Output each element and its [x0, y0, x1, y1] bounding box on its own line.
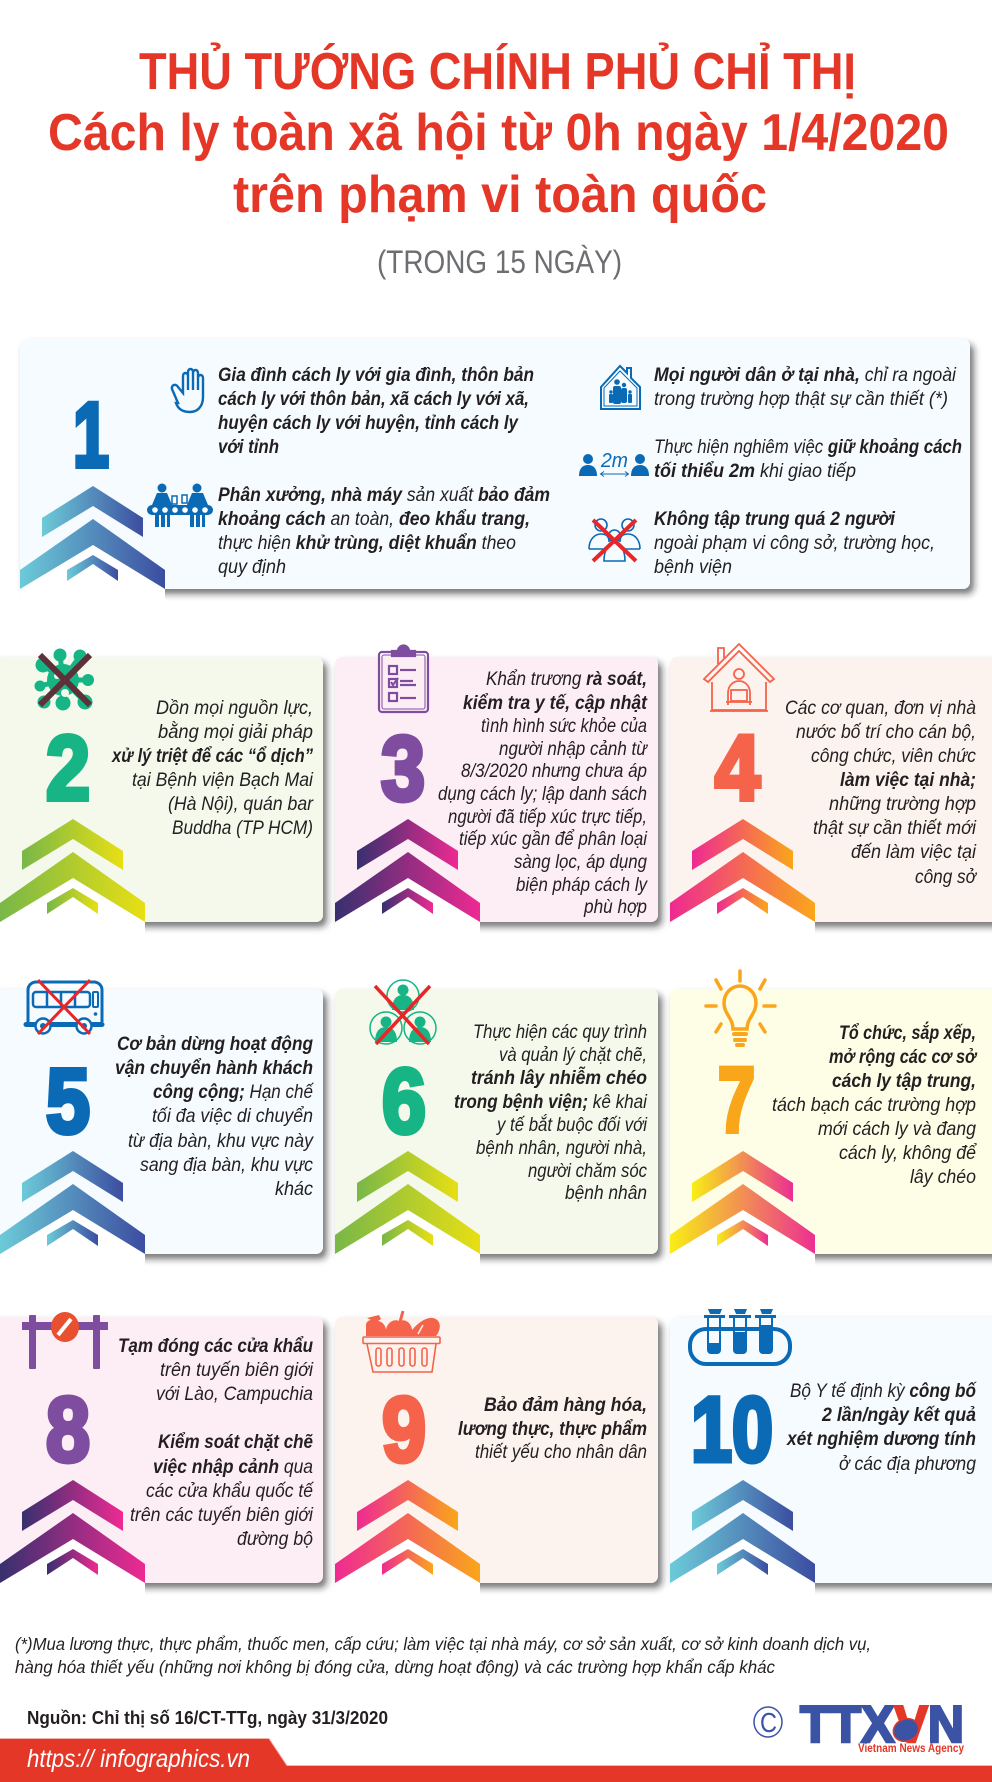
subtitle: (TRONG 15 NGÀY) — [377, 244, 622, 280]
text: block 1 left bottom — [218, 485, 550, 578]
text: panel 7: tách bạch các trường hợp — [772, 1095, 976, 1116]
text: panel 4: nước bố trí cho cán bộ, — [796, 722, 976, 743]
text: panel 7: lây chéo — [910, 1167, 976, 1188]
text: block 1 left bottom: quy định — [218, 557, 286, 578]
text: panel 3: tiếp xúc gần để phân loại — [459, 829, 648, 850]
text: panel 3: 8/3/2020 nhưng chưa áp — [461, 761, 647, 782]
text: block 1 right middle: tối thiểu 2m khi giao tiếp — [654, 461, 856, 482]
text: panel 10 — [786, 1381, 977, 1475]
icon: clipboard — [379, 646, 428, 712]
text: panel 10: 2 lần/ngày kết quả — [821, 1405, 976, 1426]
panel: 7 — [670, 971, 992, 1284]
icon: factory workers — [147, 484, 213, 527]
text: panel 6: tránh lây nhiễm chéo — [471, 1067, 647, 1089]
text: panel 9: thiết yếu cho nhân dân — [475, 1442, 647, 1463]
text: panel 2 — [111, 698, 314, 839]
chevrons 9 — [335, 1480, 480, 1613]
chevrons 10 — [670, 1480, 815, 1613]
panel: 4 — [670, 644, 992, 952]
panel: 9 — [335, 1311, 658, 1613]
number 3: 3 — [381, 718, 425, 820]
chevrons 2 — [0, 819, 145, 952]
icon: three persons crossed — [370, 980, 436, 1044]
chevrons 1 — [20, 486, 165, 619]
text: block 1 right middle: Thực hiện nghiêm việc giữ khoảng cách — [654, 437, 962, 458]
text: panel 8: trên các tuyến biên giới — [130, 1505, 314, 1526]
text: panel 3: sàng lọc, áp dụng — [514, 852, 647, 873]
text: block 1 left bottom: Phân xưởng, nhà máy sản xuất bảo đảm — [218, 485, 550, 506]
text: panel 5: vận chuyển hành khách — [115, 1058, 313, 1079]
logo: TTXVN: Vietnam News Agency — [858, 1743, 965, 1755]
text: block 1 left bottom: khoảng cách an toàn, đeo khẩu trang, — [218, 509, 530, 530]
chevrons 8 — [0, 1480, 145, 1613]
text: panel 7: mới cách ly và đang — [818, 1119, 976, 1140]
text: panel 10: xét nghiệm dương tính — [786, 1429, 976, 1450]
chevrons 3 — [335, 819, 480, 952]
text: block 1 right middle — [654, 437, 962, 482]
text: panel 9: lương thực, thực phẩm — [458, 1419, 647, 1440]
text: block 1 right bottom — [654, 509, 935, 578]
text: block 1 left top: cách ly với thôn bản, xã cách ly với xã, — [218, 389, 529, 410]
text: block 1 right bottom: bệnh viện — [654, 557, 732, 578]
text: panel 10: Bộ Y tế định kỳ công bố — [790, 1381, 977, 1402]
icon: test tubes — [690, 1309, 790, 1364]
footnote: (*)Mua lương thực, thực phẩm, thuốc men, cấp cứu; làm việc tại nhà máy, cơ sở sản xuất, cơ sở kinh doanh dịch vụ, — [15, 1634, 871, 1654]
text: panel 4: đến làm việc tại — [851, 842, 977, 863]
text: panel 6: và quản lý chặt chẽ, — [499, 1045, 647, 1066]
text: block 1 left bottom: thực hiện khử trùng, diệt khuẩn theo — [218, 533, 516, 554]
text: panel 4: công sở — [915, 867, 977, 888]
text: panel 4: làm việc tại nhà; — [840, 770, 976, 791]
icon: two metres: 2m — [600, 450, 628, 472]
title: Cách ly toàn xã hội từ 0h ngày 1/4/2020 — [48, 104, 949, 162]
text: panel 6: Thực hiện các quy trình — [473, 1022, 647, 1043]
number 2: 2 — [46, 718, 90, 820]
title: trên phạm vi toàn quốc — [233, 166, 767, 224]
text: panel 6: y tế bắt buộc đối với — [495, 1115, 648, 1136]
chevrons 4 — [670, 819, 815, 952]
logo: TTXVN: TTXVN — [800, 1696, 964, 1754]
text: panel 7: cách ly tập trung, — [832, 1071, 976, 1092]
panel: 6 — [335, 980, 658, 1284]
text: panel 10: ở các địa phương — [839, 1454, 976, 1475]
number 9: 9 — [382, 1379, 426, 1481]
chevrons 5 — [0, 1151, 145, 1284]
text: panel 9 — [458, 1395, 647, 1463]
icon: food basket — [363, 1311, 440, 1372]
text: block 1 left top: huyện cách ly với huyện, tỉnh cách ly — [218, 413, 519, 434]
text: block 1 right bottom: Không tập trung quá 2 người — [654, 509, 896, 530]
text: panel 6: trong bệnh viện; kê khai — [454, 1092, 648, 1113]
text: panel 5: từ địa bàn, khu vực này — [128, 1131, 314, 1152]
text: panel 4: Các cơ quan, đơn vị nhà — [785, 698, 976, 719]
panel: 1 — [20, 339, 970, 619]
text: panel 2: Dồn mọi nguồn lực, — [156, 698, 313, 719]
text: panel 3: người đã tiếp xúc trực tiếp, — [448, 807, 647, 828]
title: THỦ TƯỚNG CHÍNH PHỦ CHỈ THỊ — [139, 42, 856, 101]
text: panel 5: công cộng; Hạn chế — [153, 1082, 314, 1103]
text: block 1 left top: với tỉnh — [218, 437, 279, 458]
text: panel 3 — [438, 669, 649, 918]
text: block 1 right bottom: ngoài phạm vi công sở, trường học, — [654, 533, 935, 554]
text: panel 2: Buddha (TP HCM) — [172, 818, 313, 839]
text: panel 2: (Hà Nội), quán bar — [168, 794, 314, 815]
source: Nguồn: Chỉ thị số 16/CT-TTg, ngày 31/3/2020 — [27, 1708, 388, 1728]
panel: 10 — [670, 1309, 992, 1613]
text: panel 5: khác — [275, 1179, 313, 1200]
text: panel 8: trên tuyến biên giới — [160, 1360, 314, 1381]
icon: house family — [601, 366, 640, 409]
chevrons 7 — [670, 1151, 815, 1284]
number 10: 10 — [691, 1379, 773, 1481]
number 6: 6 — [382, 1050, 426, 1152]
icon: bus crossed — [26, 980, 102, 1034]
text: panel 8: đường bộ — [237, 1529, 313, 1550]
number 7: 7 — [718, 1050, 755, 1152]
text: panel 6 — [454, 1022, 648, 1204]
text: panel 6: bệnh nhân, người nhà, — [476, 1138, 647, 1159]
text: block 1 right top: trong trường hợp thật sự cần thiết (*) — [654, 389, 948, 410]
text: panel 8: Kiểm soát chặt chẽ — [158, 1432, 313, 1453]
text: block 1 right top: Mọi người dân ở tại nhà, chỉ ra ngoài — [654, 365, 957, 386]
text: panel 8: với Lào, Campuchia — [156, 1384, 313, 1405]
number 4: 4 — [715, 718, 760, 820]
panel: 8 — [0, 1312, 323, 1613]
text: panel 3: Khẩn trương rà soát, — [486, 669, 647, 690]
footnote — [15, 1634, 871, 1677]
text: panel 3: kiểm tra y tế, cập nhật — [463, 693, 648, 714]
text: panel 7 — [772, 1022, 978, 1188]
text: panel 5 — [115, 1034, 314, 1200]
footer bar — [0, 1738, 992, 1782]
text: panel 5: tối đa việc di chuyển — [152, 1106, 313, 1127]
text: panel 4: công chức, viên chức — [811, 746, 976, 767]
chevrons 6 — [335, 1151, 480, 1284]
copyright symbol: C — [760, 1707, 777, 1738]
icon: work from home — [704, 644, 774, 711]
text: panel 8 — [118, 1336, 314, 1550]
website link text: https:// infographics.vn — [27, 1745, 250, 1773]
panel: 5 — [0, 980, 323, 1284]
text: panel 8: việc nhập cảnh qua — [153, 1457, 313, 1478]
icon: closed border gate — [22, 1312, 108, 1369]
text: panel 5: sang địa bàn, khu vực — [140, 1155, 313, 1176]
text: panel 2: tại Bệnh viện Bạch Mai — [132, 770, 314, 791]
text: panel 2: bằng mọi giải pháp — [158, 722, 313, 743]
text: panel 9: Bảo đảm hàng hóa, — [484, 1395, 647, 1416]
text: panel 4: thật sự cần thiết mới — [813, 818, 977, 839]
text: panel 3: biện pháp cách ly — [516, 875, 648, 896]
footnote: hàng hóa thiết yếu (những nơi không bị đóng cửa, dừng hoạt động) và các trường hợp khẩn cấp khác — [15, 1657, 775, 1677]
icon: two metres — [579, 450, 649, 476]
number 8: 8 — [46, 1379, 90, 1481]
text: panel 7: cách ly, không để — [839, 1143, 977, 1164]
text: panel 2: xử lý triệt để các “ổ dịch” — [111, 746, 313, 767]
icon: virus crossed — [34, 648, 94, 710]
icon: light bulb — [706, 971, 775, 1045]
text: panel 3: tình hình sức khỏe của — [481, 716, 647, 737]
text: panel 3: dụng cách ly; lập danh sách — [438, 784, 647, 805]
text: panel 4 — [785, 698, 977, 888]
number 1: 1 — [73, 384, 109, 486]
panel: 3 — [335, 646, 658, 952]
icon: hand — [172, 369, 203, 412]
text: panel 8: các cửa khẩu quốc tế — [146, 1481, 314, 1502]
text: panel 3: phù hợp — [583, 897, 647, 918]
text: block 1 left top: Gia đình cách ly với gia đình, thôn bản — [218, 365, 534, 386]
text: block 1 left top — [218, 365, 534, 458]
text: panel 6: người chăm sóc — [528, 1161, 647, 1182]
text: block 1 right top — [654, 365, 957, 410]
text: panel 3: người nhập cảnh từ — [499, 739, 649, 760]
text: panel 4: những trường hợp — [829, 794, 976, 815]
text: panel 8: Tạm đóng các cửa khẩu — [118, 1336, 313, 1357]
icon: no gathering — [589, 519, 640, 561]
text: panel 6: bệnh nhân — [565, 1183, 647, 1204]
title — [48, 42, 949, 224]
panel: 2 — [0, 648, 323, 952]
number 5: 5 — [46, 1050, 90, 1152]
text: panel 5: Cơ bản dừng hoạt động — [117, 1034, 313, 1055]
